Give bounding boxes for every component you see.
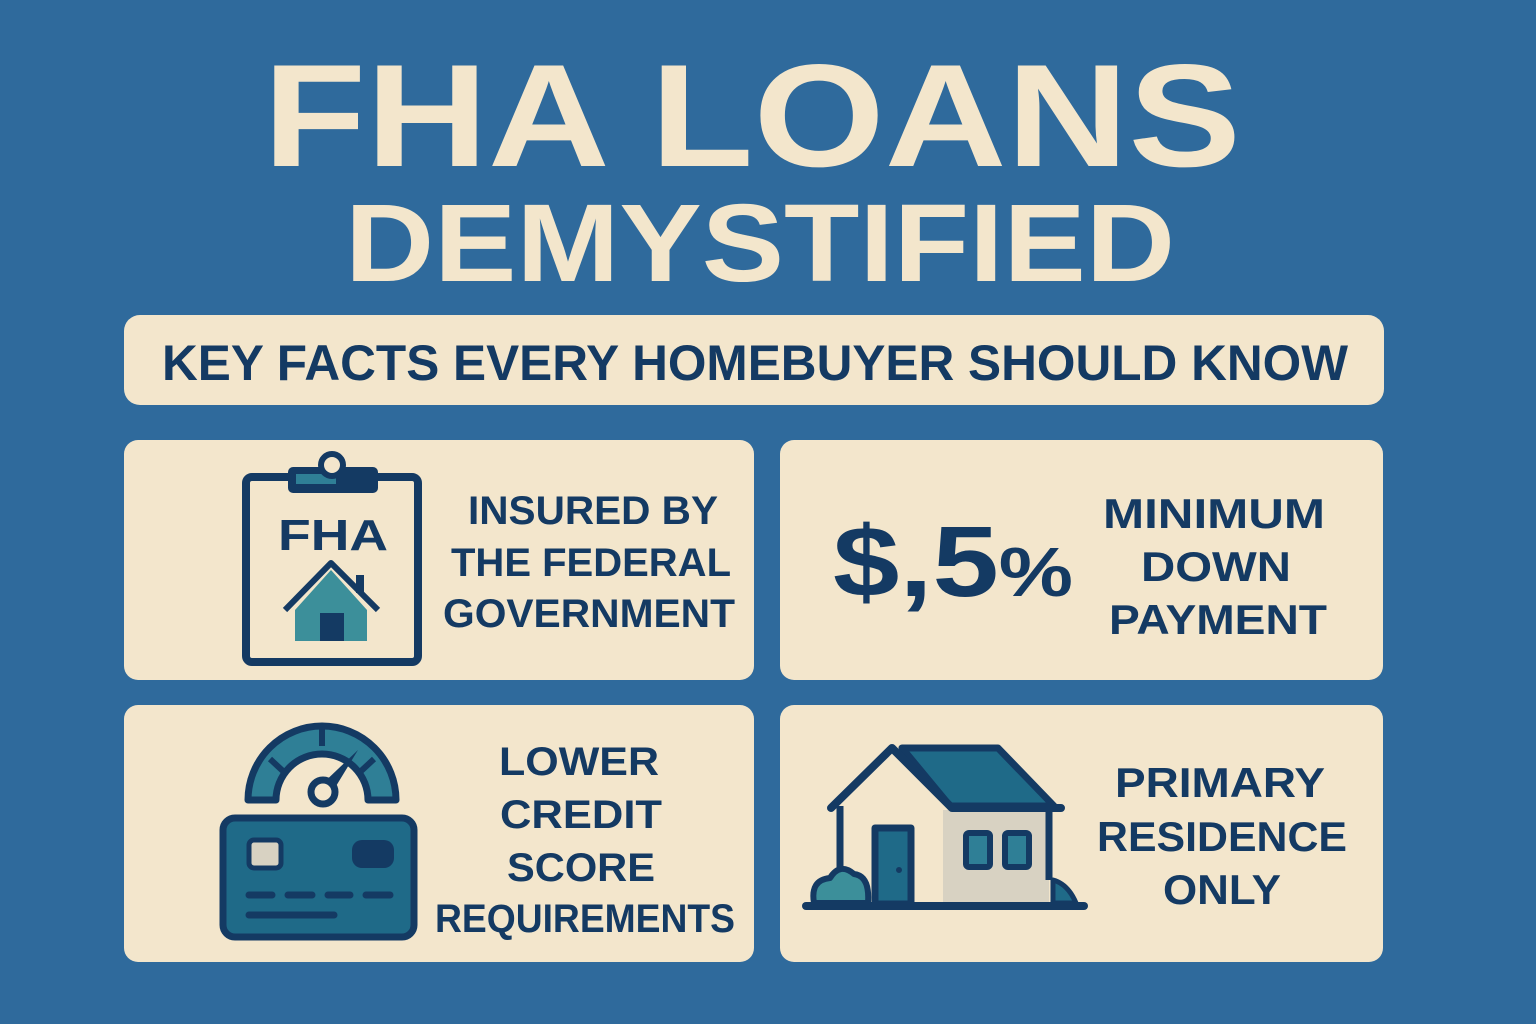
- title: [263, 34, 1241, 305]
- icon: clipboard: FHA: [278, 511, 388, 560]
- subtitle banner: [124, 315, 1384, 405]
- icon: gauge and credit card: [223, 726, 414, 937]
- text: primary residence: ONLY: [1163, 866, 1281, 913]
- icon: house: [806, 748, 1084, 906]
- title: DEMYSTIFIED: [345, 182, 1175, 305]
- text: credit: REQUIREMENTS: [435, 897, 735, 941]
- text: credit: [435, 740, 735, 941]
- text: minimum down payment: DOWN: [1141, 543, 1291, 590]
- text: primary residence: [1097, 759, 1347, 913]
- text: credit: LOWER: [499, 740, 659, 784]
- text: minimum down payment: MINIMUM: [1103, 490, 1325, 537]
- icon: 3.5% figure: $,5 %: [833, 506, 1073, 618]
- text: insured: THE FEDERAL: [451, 541, 731, 585]
- panel: primary residence: [780, 705, 1383, 962]
- text: insured: GOVERNMENT: [443, 592, 735, 636]
- text: minimum down payment: [1103, 490, 1327, 643]
- text: minimum down payment: PAYMENT: [1109, 596, 1327, 643]
- panel: credit score: [124, 705, 754, 962]
- text: credit: CREDIT: [500, 793, 662, 837]
- subtitle banner: KEY FACTS EVERY HOMEBUYER SHOULD KNOW: [162, 335, 1349, 391]
- icon: clipboard: [246, 454, 418, 662]
- text: primary residence: PRIMARY: [1115, 759, 1325, 806]
- text: insured: INSURED BY: [468, 489, 718, 533]
- text: insured: [443, 489, 735, 636]
- text: credit: SCORE: [507, 846, 655, 890]
- panel: down payment: [780, 440, 1383, 680]
- panel: insured: [124, 440, 754, 680]
- text: primary residence: RESIDENCE: [1097, 813, 1347, 860]
- title: FHA LOANS: [263, 34, 1241, 197]
